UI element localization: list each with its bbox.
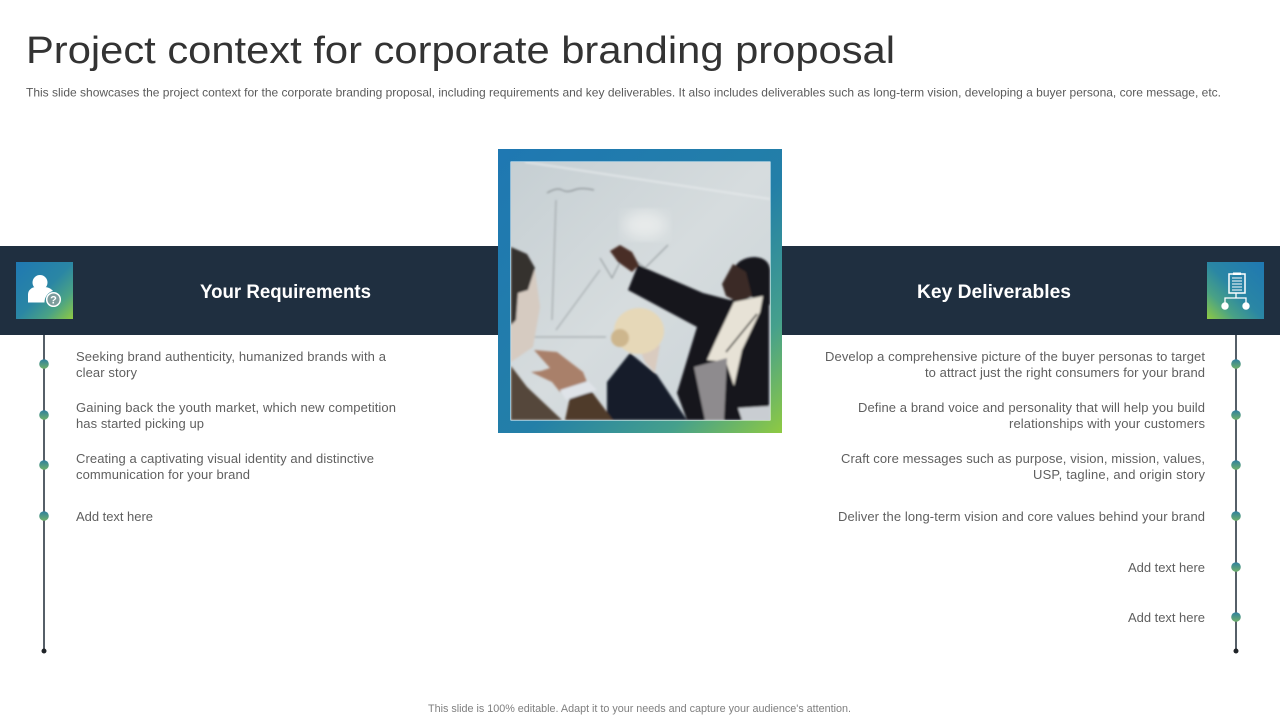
woman hair xyxy=(732,257,770,305)
deliverable 2: relationships with your customers xyxy=(1009,416,1206,431)
requirement 2: Gaining back the youth market, which new competition xyxy=(76,400,396,415)
man hair xyxy=(511,247,535,325)
requirement 1: Seeking brand authenticity, humanized brands with a xyxy=(76,349,387,364)
deliverable 6: Add text here xyxy=(1128,610,1205,625)
requirement 2 xyxy=(76,400,396,431)
requirement 1: clear story xyxy=(76,365,138,380)
panel: right header band xyxy=(782,246,1280,335)
woman face xyxy=(722,264,752,302)
requirement 4: Add text here xyxy=(76,509,153,524)
woman hand xyxy=(610,245,639,272)
deliverable 2 xyxy=(858,400,1206,431)
requirement 1 xyxy=(76,349,387,380)
deliverable 1: Develop a comprehensive picture of the buyer personas to target xyxy=(825,349,1205,364)
deliverable 3 xyxy=(841,451,1206,482)
blonde woman jacket xyxy=(607,353,687,420)
deliverable 3: Craft core messages such as purpose, vision, mission, values, xyxy=(841,451,1205,466)
requirement 3 xyxy=(76,451,374,482)
timeline: left xyxy=(39,335,49,654)
timeline: right xyxy=(1231,335,1241,654)
panel: left header band xyxy=(0,246,498,335)
man cuff xyxy=(560,381,597,400)
deliverable 5: Add text here xyxy=(1128,560,1205,575)
man head xyxy=(511,268,540,362)
deliverables list xyxy=(825,349,1206,625)
man sleeve xyxy=(565,392,613,420)
blonde woman neck xyxy=(640,345,660,372)
icon: person with question mark xyxy=(16,262,73,319)
deliverable 1 xyxy=(825,349,1205,380)
photo frame xyxy=(498,149,782,433)
heading: key deliverables: Key Deliverables xyxy=(917,281,1071,303)
deliverable 1: to attract just the right consumers for your brand xyxy=(925,365,1205,380)
folder xyxy=(694,358,727,420)
deliverable 2: Define a brand voice and personality that will help you build xyxy=(858,400,1205,415)
footer note: This slide is 100% editable. Adapt it to your needs and capture your audience's attention. xyxy=(428,703,851,715)
man body xyxy=(511,366,562,420)
blonde hair xyxy=(614,308,664,354)
photo: presenter at whiteboard xyxy=(511,162,770,420)
woman jacket xyxy=(628,265,769,420)
icon: person with question mark: ? xyxy=(50,294,57,306)
deliverable 3: USP, tagline, and origin story xyxy=(1033,467,1206,482)
deliverable 4: Deliver the long-term vision and core values behind your brand xyxy=(838,509,1205,524)
man hand xyxy=(531,350,587,392)
icon: clipboard hierarchy xyxy=(1207,262,1264,319)
heading: your requirements: Your Requirements xyxy=(200,281,371,303)
title: Project context for corporate branding proposal xyxy=(26,30,895,72)
subtitle: This slide showcases the project context for the corporate branding proposal, including requirements and key deliverables. It also includes deliverables such as long-term vision, developing a buyer persona, core message, etc. xyxy=(26,86,1221,100)
requirements list xyxy=(76,349,396,524)
requirement 3: Creating a captivating visual identity and distinctive xyxy=(76,451,374,466)
woman shirt xyxy=(707,296,763,386)
requirement 2: has started picking up xyxy=(76,416,204,431)
requirement 3: communication for your brand xyxy=(76,467,250,482)
